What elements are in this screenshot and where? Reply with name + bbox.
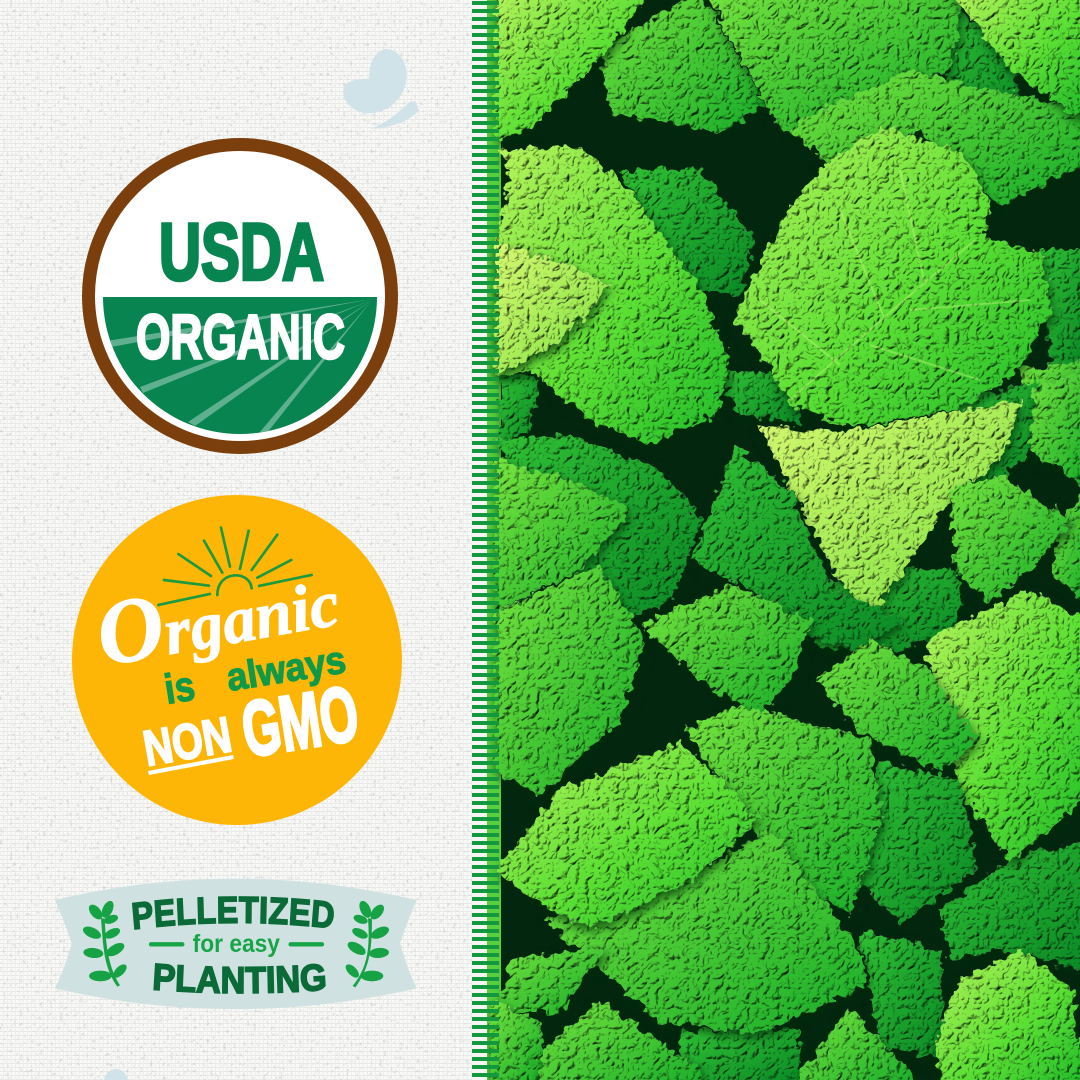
banner text: for easy: for easy (193, 930, 280, 958)
USDA Organic seal (88, 144, 392, 448)
word: NON: NON (139, 706, 236, 777)
fabric background panel (0, 0, 472, 1080)
banner dividers (151, 938, 322, 951)
striped green edge (472, 0, 499, 1080)
Pelletized for easy planting banner (55, 878, 416, 1010)
icon: right laurel sprig (343, 899, 391, 987)
seal word: USDA: USDA (159, 208, 324, 298)
field rays (100, 299, 372, 433)
seal word: ORGANIC: ORGANIC (136, 302, 345, 372)
mid left dark leaves (495, 435, 702, 620)
icon: bottom butterfly, cropped (104, 1069, 128, 1080)
icon: left laurel sprig (81, 899, 129, 987)
top row leaves (600, 0, 765, 132)
lower leaves (860, 760, 976, 925)
banner text: PELLETIZED: PELLETIZED (132, 896, 334, 930)
word: is: is (161, 662, 198, 713)
Organic is always Non GMO badge (72, 495, 402, 825)
word: GMO: GMO (236, 669, 364, 774)
underline of NON (148, 755, 234, 775)
icon: rising sun (158, 528, 312, 605)
right small leaves (1052, 494, 1080, 600)
lower central leaf (760, 400, 1022, 617)
main central leaf (735, 126, 1052, 427)
left upper leaf (495, 145, 730, 445)
back foliage (500, 0, 1080, 1080)
banner text: PLANTING: PLANTING (153, 963, 326, 994)
icon: top butterfly (343, 49, 418, 129)
word: always: always (224, 639, 349, 700)
photo: lemon balm leaves (487, 0, 1080, 1080)
script word: Organic: Organic (89, 543, 345, 686)
